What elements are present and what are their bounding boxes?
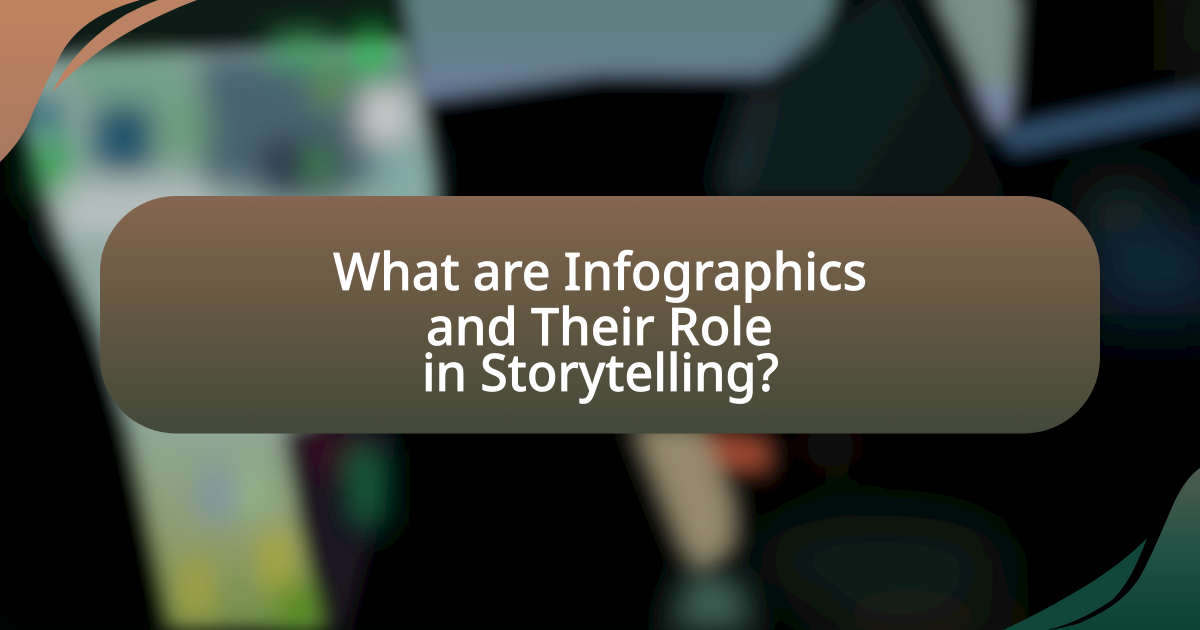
light wedge at top right [918,0,1020,135]
title text: in Storytelling? [422,336,779,407]
title text [333,235,867,407]
bluish shoulder edge [718,85,775,190]
upper monitor [398,0,850,100]
lower dark panel beside tablet [285,428,392,630]
dark green haze at top of tablet [60,0,400,35]
title text: and Their Role [426,290,773,361]
panel: title pill [100,196,1100,434]
dim right side [750,0,1200,630]
tablet screen [28,42,434,630]
blue monitor edge stripe [1000,80,1200,152]
corner accent: bottom right [1003,468,1200,630]
dark figure triangle [720,0,1010,200]
title text: What are Infographics [333,235,867,306]
beige hand, red spot, teal sleeve [632,425,770,575]
corner accent: top left [0,0,197,162]
tablet content blobs [30,28,425,630]
